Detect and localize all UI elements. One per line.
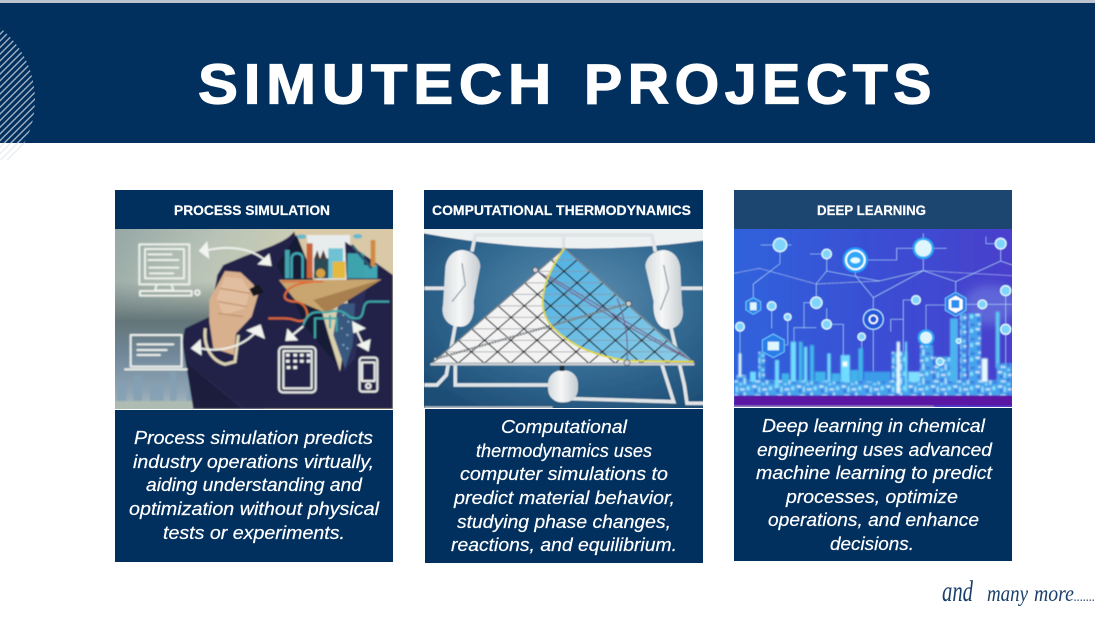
hand: [209, 271, 258, 355]
panel: deep learning: [730, 190, 1017, 561]
orange pipe: [268, 282, 313, 321]
title: PROJECTS: [584, 52, 937, 116]
tie lines: [535, 270, 694, 362]
bottom capsule: [548, 370, 578, 402]
closing note: and: [942, 575, 974, 608]
chalk phone: [360, 358, 377, 392]
description: computational thermodynamics: predict material behavior,: [453, 488, 675, 508]
triangle white: [432, 248, 694, 363]
suit: [182, 232, 393, 409]
description: computational thermodynamics: thermodynamics uses: [476, 441, 652, 461]
chalk arrows: [207, 248, 266, 261]
description: deep learning: Deep learning in chemical: [762, 416, 986, 436]
title: [198, 52, 937, 116]
left capsule: [442, 250, 480, 327]
right capsule: [645, 250, 683, 329]
closing note: many: [987, 581, 1029, 606]
description: computational thermodynamics: studying phase changes,: [457, 512, 671, 532]
description: deep learning: [734, 408, 1012, 561]
neck and shirt: [293, 225, 393, 285]
panel heading: deep learning: DEEP LEARNING: [817, 203, 926, 218]
panel: computational thermodynamics: [420, 190, 707, 563]
image: industrial plant with network nodes: [734, 229, 1012, 407]
yellow curve: [543, 248, 694, 362]
description: process simulation: Process simulation predicts: [134, 428, 373, 448]
description: process simulation: optimization without physical: [129, 499, 380, 519]
tie: [333, 303, 355, 368]
cuff: [205, 328, 238, 364]
plant platform: [279, 279, 382, 313]
nodes: [736, 238, 1011, 365]
pen: [249, 284, 264, 296]
image: businessman sketching process plant: [115, 229, 393, 409]
chalk laptop: [131, 335, 182, 367]
teal pipes: [303, 302, 389, 338]
description: deep learning: processes, optimize: [785, 487, 958, 507]
panel heading: computational thermodynamics: COMPUTATIONAL THERMODYNAMICS: [432, 203, 691, 218]
blue phase: [543, 248, 694, 362]
description: deep learning: engineering uses advanced: [757, 440, 993, 460]
description: deep learning: operations, and enhance: [768, 510, 979, 530]
grid: [445, 260, 681, 352]
panel: process simulation: [110, 190, 397, 562]
description: process simulation: [115, 410, 393, 562]
triangle frame: [432, 248, 694, 363]
panel heading: process simulation: PROCESS SIMULATION: [174, 203, 330, 218]
description: process simulation: tests or experiments.: [163, 523, 345, 543]
description: deep learning: machine learning to predict: [756, 463, 993, 483]
description: process simulation: aiding understanding and: [146, 475, 363, 495]
chalk tablet: [279, 347, 316, 392]
top white arc: [420, 225, 707, 248]
pipes: [424, 235, 704, 403]
network lines: [734, 268, 1012, 284]
chalk monitor: [139, 244, 189, 284]
bottom edge strip: [424, 406, 553, 408]
description: computational thermodynamics: Computational: [501, 417, 628, 437]
title: SIMUTECH: [198, 52, 557, 116]
factory: [285, 250, 290, 278]
closing note: [942, 575, 1095, 608]
description: computational thermodynamics: reactions, and equilibrium.: [451, 535, 677, 555]
panel heading: deep learning: [734, 190, 1012, 229]
description: process simulation: industry operations virtually,: [133, 452, 374, 472]
header banner: [0, 0, 1095, 160]
panel heading: computational thermodynamics: [424, 190, 703, 229]
description: computational thermodynamics: computer simulations to: [460, 464, 668, 484]
panel heading: process simulation: [115, 190, 393, 229]
skyline: [734, 312, 1012, 396]
description: computational thermodynamics: [425, 409, 703, 563]
image: ternary phase diagram: [424, 229, 703, 408]
description: deep learning: decisions.: [830, 534, 914, 554]
